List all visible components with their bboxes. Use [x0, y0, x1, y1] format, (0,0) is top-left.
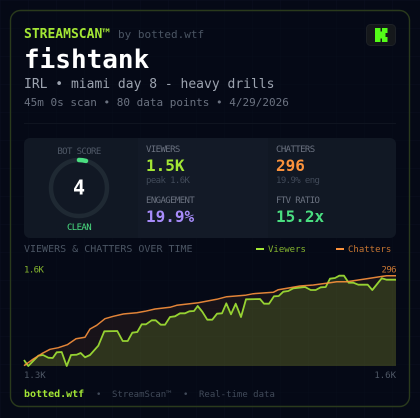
footer: StreamScan™ [112, 390, 172, 400]
chart heading: VIEWERS & CHATTERS OVER TIME [24, 244, 193, 255]
stat: chatters [276, 145, 320, 186]
footer: Real-time data [199, 390, 275, 400]
stat: engagement: 19.9% [146, 207, 195, 226]
gauge: bot score: CLEAN [67, 223, 91, 233]
scan metadata: 45m 0s scan • 80 data points • 4/29/2026 [24, 96, 289, 109]
line chart: 1.6K [24, 266, 44, 276]
gauge: bot score: BOT SCORE [57, 147, 101, 157]
stat: viewers: 1.5K [146, 156, 185, 175]
stat: viewers [146, 145, 191, 186]
line chart [24, 266, 397, 381]
stat: chatters: 19.9% eng [276, 176, 320, 186]
line chart: 1.3K [24, 371, 46, 381]
line chart: 1.6K [374, 371, 397, 381]
legend: Chatters [348, 245, 391, 255]
icon: kick logo badge [366, 24, 396, 46]
stat: viewers: VIEWERS [146, 145, 180, 155]
stat: ftv ratio: 15.2x [276, 207, 325, 226]
stat: engagement [146, 196, 195, 226]
footer [24, 389, 275, 400]
brand heading [24, 27, 204, 42]
stat: chatters: 296 [276, 156, 305, 175]
title: fishtank [24, 45, 150, 75]
gauge: bot score: 4 [73, 176, 85, 200]
footer: • [183, 390, 188, 400]
line chart: 296 [382, 266, 396, 276]
footer: • [96, 390, 101, 400]
legend: Viewers [268, 245, 306, 255]
brand heading: STREAMSCAN™ [24, 27, 110, 42]
footer: botted.wtf [24, 389, 84, 400]
stat: ftv ratio [276, 196, 325, 226]
gauge: bot score [51, 147, 107, 233]
stat: chatters: CHATTERS [276, 145, 315, 155]
legend [256, 245, 391, 255]
panel: stats [24, 138, 396, 238]
brand heading: by botted.wtf [118, 28, 204, 41]
stat: engagement: ENGAGEMENT [146, 196, 195, 206]
stat: ftv ratio: FTV RATIO [276, 196, 320, 206]
stat: viewers: peak 1.6K [146, 176, 191, 186]
subtitle: IRL • miami day 8 - heavy drills [24, 77, 274, 92]
